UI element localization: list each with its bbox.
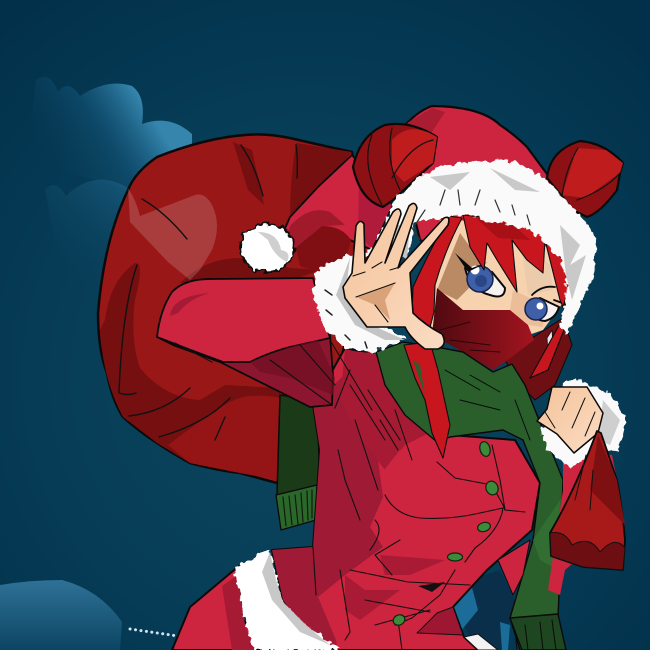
sack creases: [119, 145, 297, 440]
large sack: [98, 134, 370, 483]
hair: [404, 215, 570, 458]
hood ear: left: [353, 124, 437, 207]
face mask: [432, 288, 534, 370]
sleeve fur cuff: [313, 248, 408, 353]
dark red shadow behind neck: [505, 318, 572, 400]
hood: [395, 106, 565, 300]
dotted line: [130, 629, 178, 636]
skirt with fur trim: [172, 550, 498, 650]
background cloud: left lobes: [45, 180, 128, 290]
dress body: [272, 348, 540, 650]
scarf around neck: [376, 342, 566, 650]
sack highlight: [128, 188, 217, 280]
background cloud: top left: [30, 77, 192, 190]
hood fur trim: [373, 161, 597, 336]
scarf: back end with fringe: [276, 395, 320, 530]
right eye: [525, 287, 565, 321]
girl figure: [98, 106, 627, 650]
gripping fist: [537, 387, 603, 453]
outstretched sleeve: [157, 278, 372, 410]
fist cuff fur: [540, 377, 627, 467]
background patch between dress and scarf: [453, 570, 515, 650]
small red pouch: [550, 431, 625, 570]
face: [425, 220, 565, 345]
dress seams: [313, 370, 525, 650]
left eye: [455, 253, 505, 296]
hood ear: right: [547, 141, 623, 217]
background cloud: bottom left: [0, 580, 122, 650]
hat tail resting on the sack: [279, 155, 392, 272]
hat pom-pom: [240, 224, 294, 272]
raised open hand: [343, 203, 449, 349]
dress buttons: [391, 440, 500, 627]
ear: [547, 330, 553, 352]
right sleeve behind scarf: [498, 450, 617, 595]
